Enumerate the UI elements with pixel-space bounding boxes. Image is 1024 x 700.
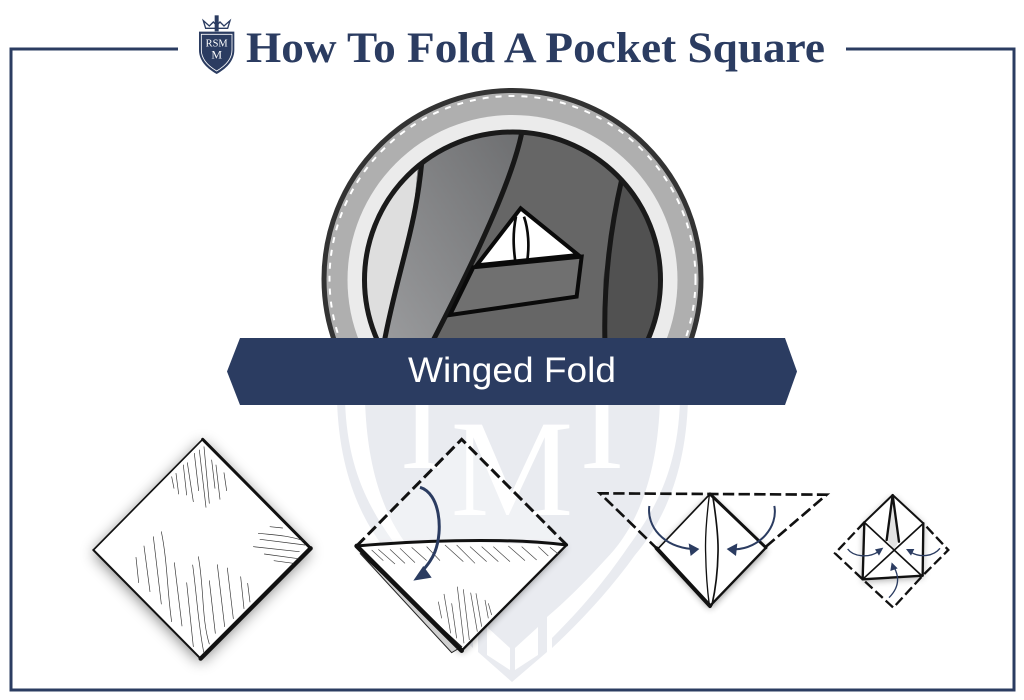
badge: jacket pocket illustration	[322, 88, 704, 338]
step 4: final fold	[835, 495, 948, 608]
jacket outer ring	[322, 88, 704, 338]
jacket inner circle outline	[362, 130, 663, 338]
pocket and folded square	[450, 208, 582, 315]
fabric hatching	[372, 545, 558, 643]
watermark letters: I	[400, 349, 444, 498]
fabric hatching	[136, 447, 305, 653]
icon: crest logo	[199, 15, 234, 74]
jacket inner view	[367, 134, 658, 338]
arrows: fold to center	[848, 548, 940, 598]
watermark letters	[400, 349, 624, 545]
dashed top half	[357, 439, 567, 546]
dashed folds	[835, 522, 948, 608]
banner: Winged Fold: Winged Fold	[408, 351, 616, 390]
banner: Winged Fold	[227, 338, 797, 405]
dashed folds	[600, 493, 827, 548]
watermark shield	[337, 349, 688, 682]
arrows: fold inward	[649, 506, 775, 556]
watermark letters: M	[451, 392, 573, 545]
watermark letters: I	[580, 349, 624, 498]
title block	[199, 15, 825, 74]
step 3: triangle with side folds	[600, 493, 827, 609]
step 2: folded in half	[357, 439, 567, 653]
icon: crest logo: RSM	[206, 39, 228, 50]
step 1: open square	[93, 439, 311, 662]
back flap	[360, 553, 462, 653]
arrow: fold down	[413, 487, 439, 581]
title: How To Fold A Pocket Square	[246, 25, 825, 72]
icon: crest logo: M	[211, 47, 222, 61]
